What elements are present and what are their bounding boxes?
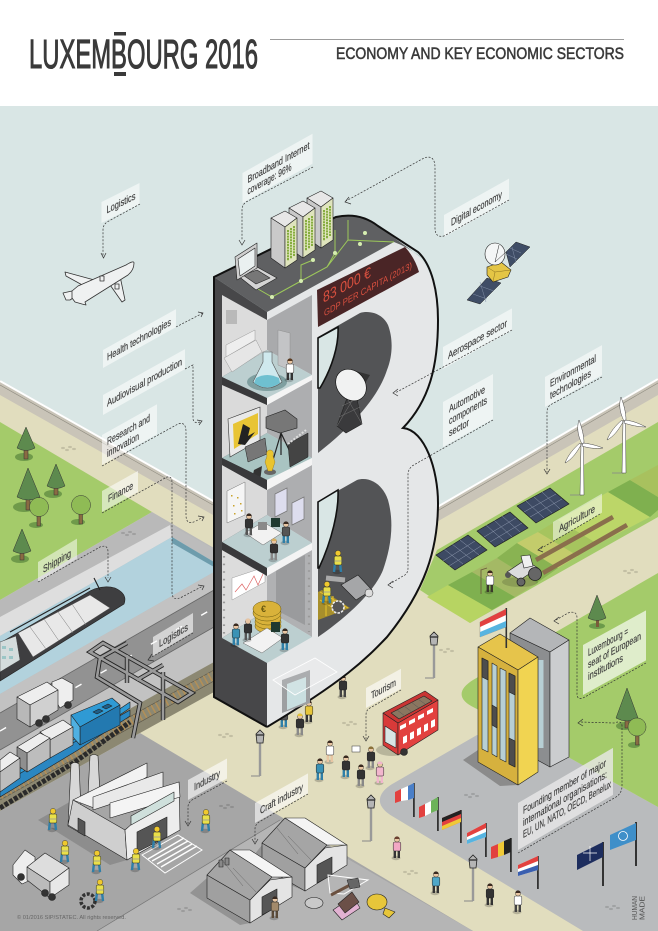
crosswalk hatch <box>142 835 202 873</box>
shoreline wall <box>0 378 658 590</box>
label: Luxembourg seat of European institutions <box>583 610 646 695</box>
round tool plate <box>305 898 323 908</box>
B outline <box>214 216 438 727</box>
label: Tourism: Tourism <box>371 677 396 702</box>
farmer <box>481 568 494 594</box>
GDP display <box>317 241 419 327</box>
lower opening <box>318 490 338 568</box>
road and rail corridor <box>0 572 214 811</box>
label: Environmental technologies: technologies <box>550 368 591 402</box>
upper counter <box>318 312 392 453</box>
arrow: industry to factory <box>185 781 227 826</box>
label: Broadband Internet: coverage: 96% <box>248 162 291 197</box>
satellite dish <box>329 363 373 433</box>
arrow: tourism to bus <box>363 690 401 741</box>
delivery truck <box>13 850 69 900</box>
label: Tourism <box>366 669 401 708</box>
label: Research and innovation: Research and <box>107 413 150 448</box>
label: Automotive components sector: Automotive <box>449 384 485 415</box>
label: Research and innovation: innovation <box>107 431 139 460</box>
arrow: digital economy to servers <box>345 157 509 236</box>
label: Luxembourg seat of European institutions: Luxembourg = <box>588 626 628 659</box>
server racks <box>271 191 333 268</box>
label: Shipping <box>38 539 77 582</box>
circuit traces <box>258 220 394 299</box>
gray building <box>510 618 569 767</box>
B front face <box>267 242 438 727</box>
label: Finance <box>102 471 138 512</box>
B top face <box>214 216 422 312</box>
flag: Luxembourg on building <box>480 608 507 648</box>
flag: France <box>395 783 415 817</box>
plaza people <box>278 675 522 914</box>
label: Automotive components sector: components <box>449 395 487 427</box>
label: Founding member <box>518 748 613 850</box>
label: Health technologies <box>103 309 176 368</box>
arrow: agriculture to field <box>538 514 600 552</box>
arrow: seat of institutions to building <box>554 612 646 698</box>
room: finance vault: € <box>261 604 266 614</box>
logo: Human Made <box>630 896 646 920</box>
canal water <box>0 537 214 694</box>
yellow building <box>478 634 538 785</box>
arrow: aerospace to dish <box>393 330 512 396</box>
arrow: finance to vault <box>102 477 204 599</box>
automotive workers and parts <box>318 550 373 620</box>
factory <box>68 754 180 860</box>
gift box <box>333 892 360 920</box>
arrow: founding member to building <box>518 719 622 853</box>
room: finance and research <box>222 465 312 568</box>
upper opening <box>318 327 338 388</box>
arrow: audiovisual to room <box>185 365 202 425</box>
canal bank <box>0 512 214 720</box>
label: Automotive components sector <box>443 374 493 447</box>
tractor <box>502 555 542 587</box>
solar panels <box>436 488 569 570</box>
road truck <box>17 678 73 727</box>
left green park <box>0 422 152 600</box>
arrow: automotive to exhaust <box>388 420 493 588</box>
arrow: craft to workshop <box>252 794 308 844</box>
label: Agriculture: Agriculture <box>559 503 595 535</box>
red tour bus <box>376 691 438 756</box>
label: Broadband Internet <box>242 134 312 203</box>
flag: Luxembourg <box>467 823 487 857</box>
label: Logistics (air): Logistics <box>107 190 136 216</box>
label: Health technologies: Health technologies <box>107 316 171 364</box>
label: Aerospace sector <box>443 308 512 369</box>
label: Craft industry <box>255 773 308 823</box>
label: Luxembourg seat of European institutions: institutions <box>588 652 623 683</box>
room: audiovisual <box>222 380 312 498</box>
arrow: shipping to ship <box>38 546 111 582</box>
yellow building shadow <box>463 750 518 786</box>
label: Environmental technologies <box>545 345 602 407</box>
lower counter <box>318 479 391 637</box>
tree group: right lawn <box>616 688 646 748</box>
logo: Human Made: HUMAN <box>630 896 639 920</box>
floor slabs <box>222 375 312 576</box>
label: Founding member: Founding member of major <box>523 758 606 817</box>
tree: right top conifer <box>588 595 606 629</box>
label: Industry <box>188 759 227 800</box>
logo: Human Made: MADE <box>638 896 646 920</box>
label: Industry: Industry <box>194 768 220 793</box>
label: Founding member: international organisations: <box>523 769 607 829</box>
label: Aerospace sector: Aerospace sector <box>448 318 507 362</box>
train <box>0 698 130 808</box>
flag: NATO <box>577 842 604 886</box>
arrow: health to room <box>176 312 203 327</box>
wind turbine 2 <box>607 397 646 473</box>
label: Research and innovation <box>102 404 157 465</box>
arrow: broadband to laptop <box>239 167 313 245</box>
gantry crane <box>90 643 192 738</box>
workers <box>48 808 210 903</box>
label: Digital economy <box>444 179 509 237</box>
room: health technologies <box>222 295 312 400</box>
craftsman <box>270 896 279 920</box>
airplane <box>63 262 134 305</box>
entrance door <box>273 658 337 713</box>
label: Logistics (road) <box>153 613 193 656</box>
right green area <box>462 573 658 807</box>
B left column <box>214 277 267 727</box>
craft workshop rear <box>262 818 347 891</box>
arrow: research to room <box>102 423 204 523</box>
satellite <box>467 242 530 304</box>
header rule <box>270 39 624 40</box>
wind turbine 1 <box>565 420 603 495</box>
hammer <box>328 875 368 895</box>
arrow: environmental to panels <box>544 377 602 474</box>
label: Logistics (air) <box>102 183 140 223</box>
label: Automotive components sector: sector <box>449 417 469 439</box>
copyright: © 01/2016 SIP/STATEC. All rights reserved. <box>17 914 126 921</box>
room: finance vault <box>222 550 312 663</box>
craft workshop front <box>207 850 292 923</box>
label: Audiovisual production: Audiovisual production <box>107 356 182 410</box>
lamp posts <box>251 632 477 901</box>
label: Environmental technologies: Environmental <box>550 353 596 390</box>
label: Logistics (road): Logistics <box>159 622 188 650</box>
flag: United Nations <box>610 822 637 866</box>
laptop <box>235 243 277 290</box>
header background <box>0 0 658 106</box>
ship <box>0 578 125 681</box>
flag: Netherlands <box>518 856 539 889</box>
label: Broadband Internet: Broadband Internet <box>248 140 310 186</box>
tree group: left park <box>11 427 90 563</box>
flag: Italy <box>419 797 439 831</box>
industrial plaza <box>0 733 473 931</box>
industry gear <box>81 894 95 908</box>
label: Digital economy: Digital economy <box>451 189 502 229</box>
right gray plaza <box>380 735 658 931</box>
GDP display: 83 000 € <box>323 264 371 307</box>
label: Finance: Finance <box>108 480 133 505</box>
label: Agriculture <box>553 494 602 541</box>
fields <box>420 422 658 623</box>
title: LUXEMBOURG 2016 <box>29 31 258 77</box>
giant letter B <box>214 216 438 727</box>
arrow: logistics to plane <box>101 204 140 258</box>
label: Audiovisual production <box>103 349 185 415</box>
cheese <box>367 894 395 918</box>
GDP display: GDP PER CAPITA (2013) <box>324 261 412 319</box>
arrow: logistics to truck <box>148 633 193 661</box>
label: Shipping: Shipping <box>43 548 71 576</box>
title <box>29 31 258 77</box>
label: Craft industry: Craft industry <box>260 782 303 817</box>
flag: Belgium <box>491 838 512 872</box>
ground base <box>0 395 658 931</box>
flag: Germany <box>442 810 462 843</box>
